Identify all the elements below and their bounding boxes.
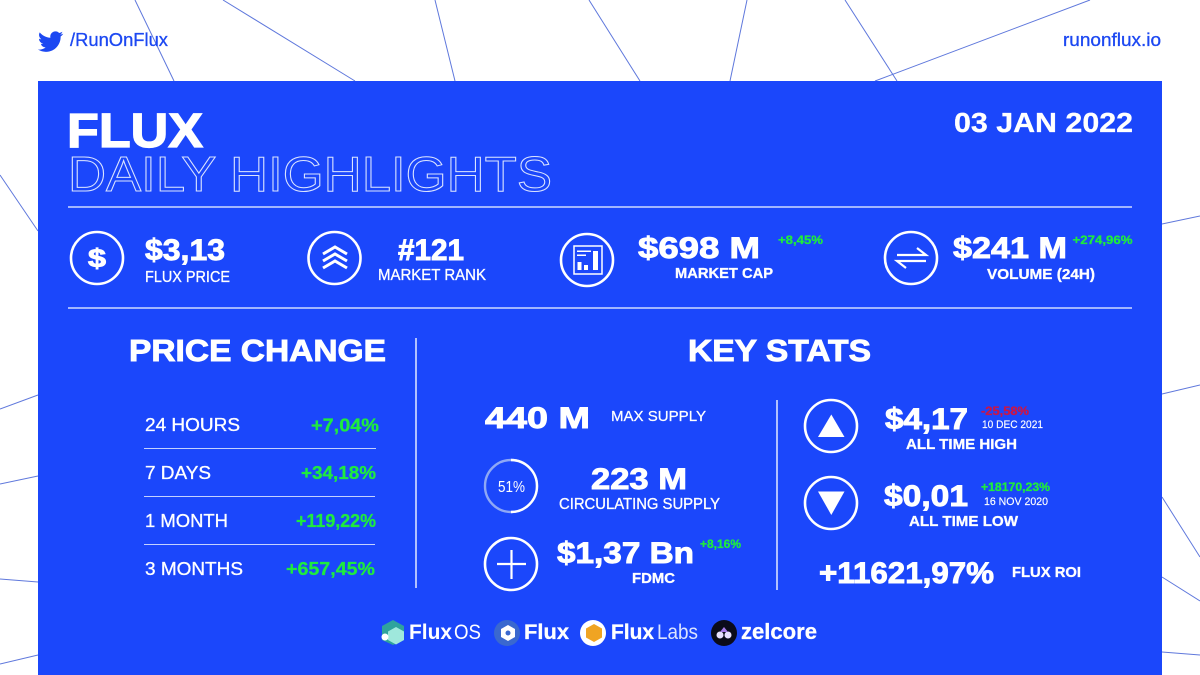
row: 24 hours: 24 HOURS — [145, 415, 240, 435]
row: 3 months: +657,45% — [286, 559, 375, 579]
stat: max supply: 440 M — [485, 402, 590, 435]
partner logos — [382, 619, 817, 646]
stat: fdmc: +8,16% — [700, 539, 741, 551]
row: 24 hours: +7,04% — [311, 416, 379, 436]
logo: Flux — [494, 620, 569, 646]
stat: all time high — [805, 400, 1043, 453]
market cap label: MARKET CAP — [675, 265, 773, 282]
stat: max supply: MAX SUPPLY — [611, 408, 706, 425]
row: 3 months — [145, 559, 375, 579]
stat: fdmc — [485, 537, 741, 590]
row: 1 month — [145, 511, 376, 531]
icon: chevrons up — [308, 232, 360, 284]
panel: price change — [129, 333, 386, 579]
stat: fdmc: FDMC — [632, 571, 676, 587]
stat: flux price — [71, 232, 230, 286]
icon: dollar — [71, 232, 123, 284]
row: 3 months: 3 MONTHS — [145, 559, 243, 579]
stat: market rank — [308, 232, 487, 284]
market rank label: MARKET RANK — [378, 267, 487, 284]
icon: exchange arrows — [885, 232, 937, 284]
stat: all time high: $4,17 — [885, 403, 968, 436]
heading: key stats: KEY STATS — [688, 333, 871, 368]
stat: all time low: +18170,23% — [981, 482, 1050, 494]
twitter handle text: /RunOnFlux — [70, 30, 168, 50]
header: twitter handle — [38, 30, 168, 52]
stat: flux roi: +11621,97% — [819, 557, 994, 590]
stat: all time high: -25,58% — [981, 406, 1029, 418]
date: 03 JAN 2022 — [954, 107, 1133, 138]
stat: fdmc: $1,37 Bn — [557, 537, 694, 570]
icon: up triangle — [805, 400, 857, 452]
stat: all time low — [805, 477, 1050, 530]
row: 7 days — [145, 463, 376, 483]
stat: all time high: 10 DEC 2021 — [982, 419, 1043, 431]
stat: circulating supply: CIRCULATING SUPPLY — [559, 496, 720, 513]
stat: all time low: $0,01 — [884, 480, 968, 513]
volume label: VOLUME (24H) — [987, 266, 1095, 283]
panel: key stats — [485, 333, 1081, 590]
logo: Flux: Flux — [524, 621, 569, 644]
row: 24 hours — [145, 415, 379, 436]
title: FLUX: FLUX — [67, 105, 203, 158]
title: DAILY HIGHLIGHTS outlined: DAILY HIGHLIGHTS — [68, 148, 552, 202]
logo: FluxOS: Flux — [409, 621, 452, 644]
header: website: runonflux.io — [1063, 30, 1161, 50]
stat: all time low: ALL TIME LOW — [909, 514, 1018, 530]
market rank value: #121 — [398, 234, 464, 267]
stat: volume — [885, 232, 1132, 284]
logo: FluxOS: OS — [454, 621, 481, 644]
stat: circulating supply — [485, 460, 720, 513]
row: 7 days: +34,18% — [301, 463, 376, 483]
logo: FluxOS — [382, 620, 481, 645]
title — [67, 105, 552, 202]
stat: market cap — [561, 232, 823, 286]
stat: circulating supply: 223 M — [591, 463, 687, 496]
market cap change: +8,45% — [778, 235, 823, 247]
row: 1 month: 1 MONTH — [145, 511, 228, 531]
stat: all time high: ALL TIME HIGH — [906, 437, 1017, 453]
row: 1 month: +119,22% — [296, 511, 376, 531]
icon: twitter bird — [38, 31, 63, 52]
icon: chart — [561, 234, 613, 286]
icon: dollar: $ — [88, 243, 107, 273]
icon: down triangle — [805, 477, 857, 529]
logo: FluxLabs: Labs — [657, 621, 698, 644]
icon: progress ring 51%: 51% — [498, 479, 525, 496]
flux price value: $3,13 — [145, 234, 225, 267]
stat: flux roi: FLUX ROI — [1012, 565, 1081, 581]
flux price label: FLUX PRICE — [145, 269, 230, 286]
logo: zelcore: zelcore — [741, 619, 817, 644]
stat: all time low: 16 NOV 2020 — [984, 496, 1048, 508]
market cap value: $698 M — [638, 232, 760, 265]
volume change: +274,96% — [1072, 235, 1132, 247]
logo: FluxLabs — [580, 620, 698, 646]
stat: max supply — [485, 402, 706, 435]
icon: progress ring 51% — [485, 460, 537, 512]
logo: zelcore — [711, 619, 817, 646]
row: 7 days: 7 DAYS — [145, 463, 211, 483]
volume value: $241 M — [953, 232, 1067, 265]
heading: price change: PRICE CHANGE — [129, 333, 386, 368]
logo: FluxLabs: Flux — [611, 621, 654, 644]
icon: plus — [485, 538, 537, 590]
stat: flux roi — [819, 557, 1081, 590]
